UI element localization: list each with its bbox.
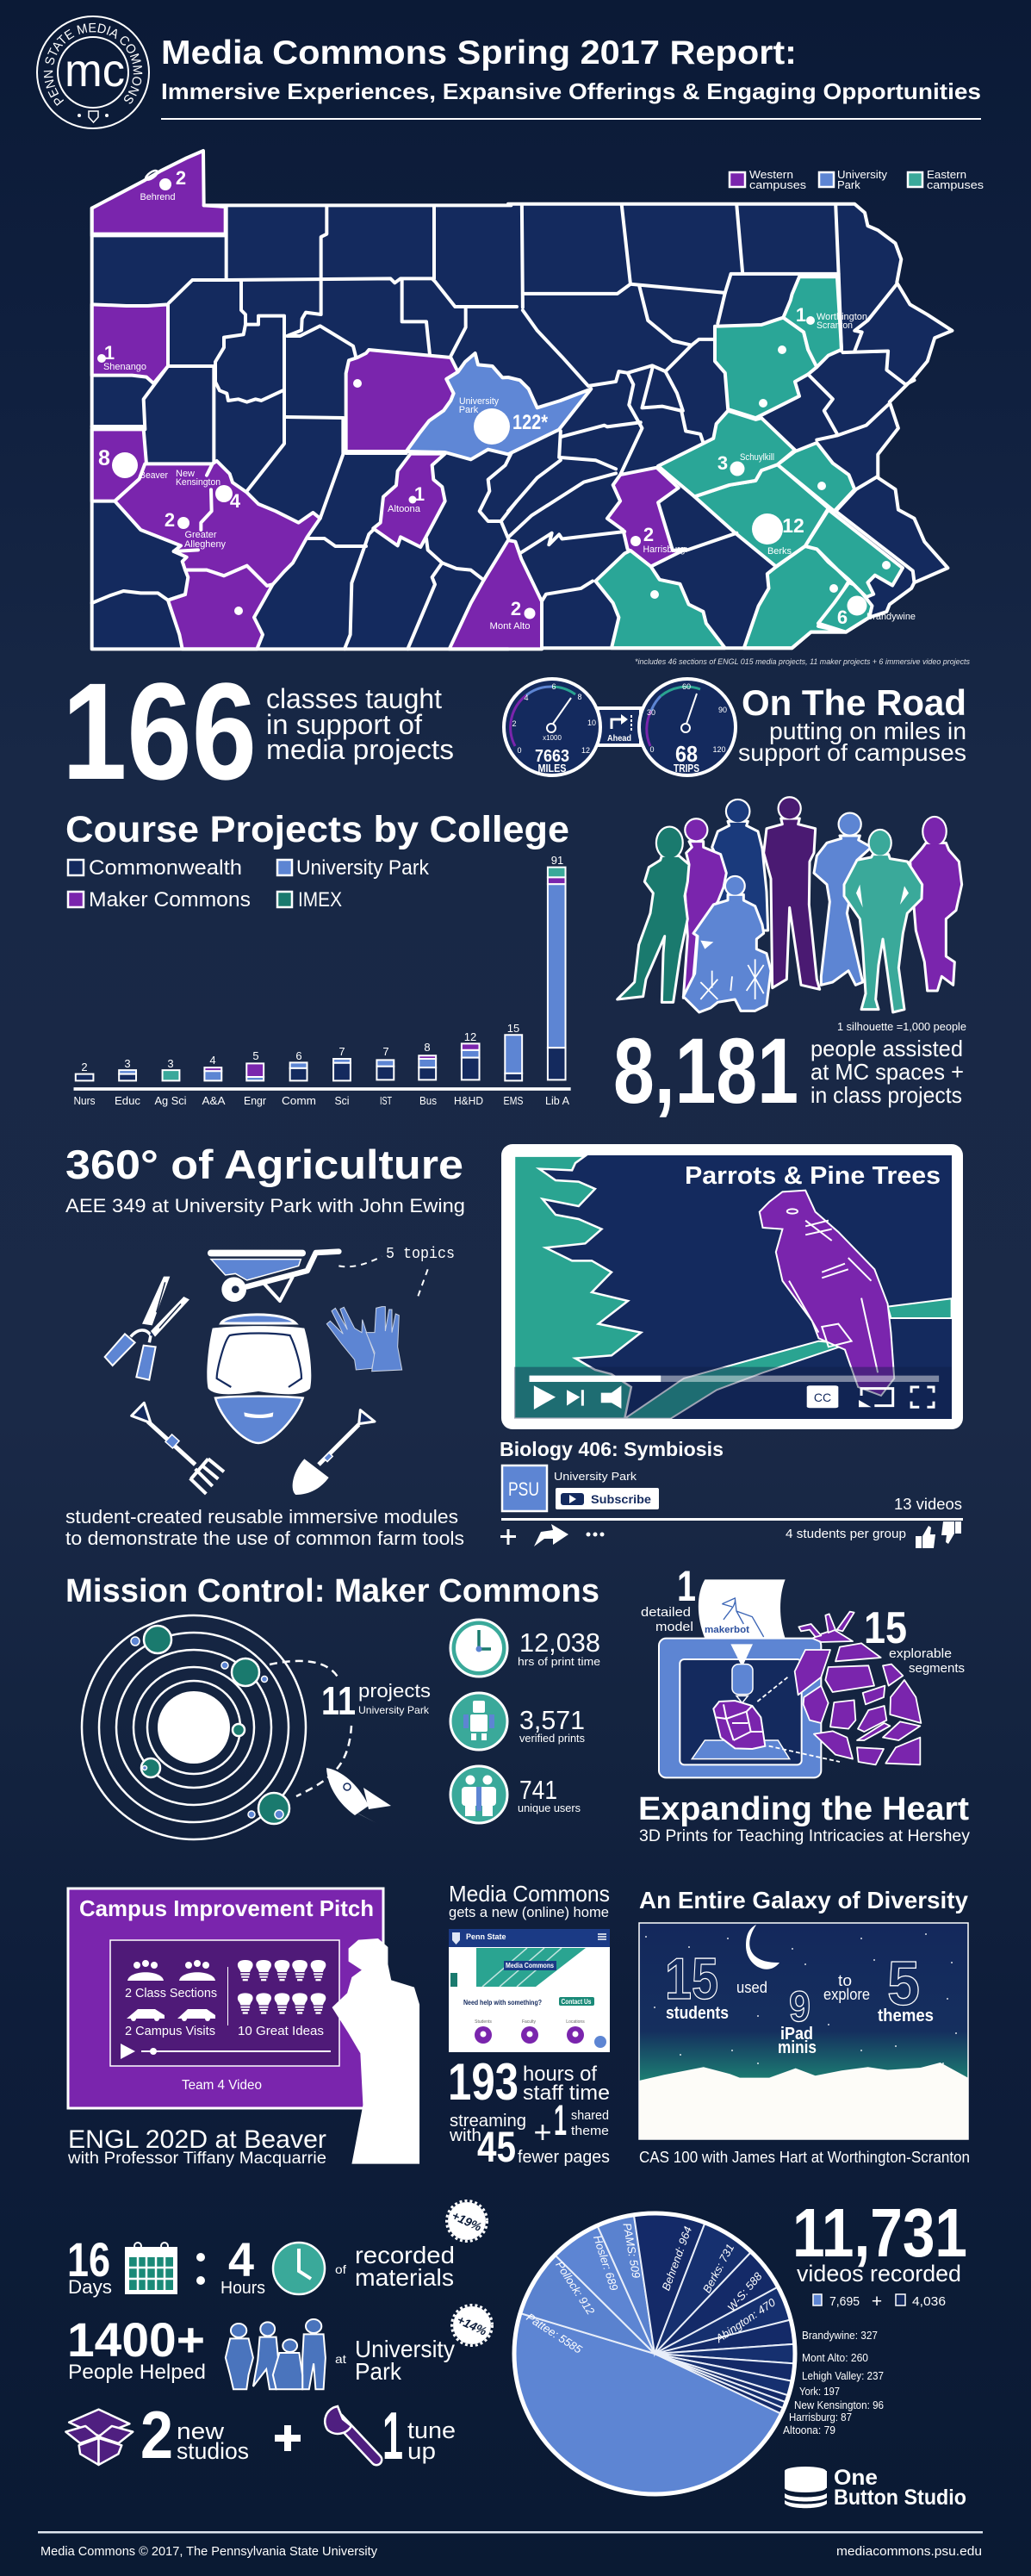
map legend: Eastern	[927, 168, 966, 181]
stat: streaming with 45 fewer pages: theme	[571, 2124, 609, 2138]
gauges: miles and trips: 68	[675, 741, 698, 767]
pie chart: videos by location: Altoona: 79	[783, 2424, 835, 2436]
gauges: miles and trips: Ahead	[607, 734, 631, 744]
logo: Penn State Media Commons seal	[36, 16, 150, 129]
map numbers and campus labels: Berks	[767, 546, 792, 557]
icon: open box	[65, 2410, 133, 2465]
pie chart: videos by location: Lehigh Valley: 237	[802, 2370, 884, 2382]
icon: 3D printer and heart	[659, 1579, 921, 1777]
pie chart: videos by location: Pattee: 5585	[524, 2311, 585, 2356]
stat: 15 explorable segments	[864, 1603, 965, 1676]
stat: 16 days : 4 hours	[67, 2232, 455, 2298]
pie chart: videos by location: Behrend: 964	[659, 2224, 694, 2293]
stat: 11 projects: projects	[358, 1680, 431, 1702]
paper sheet	[699, 1579, 786, 1639]
website screenshot: Faculty	[522, 2019, 537, 2025]
icons: thumbs up and down	[916, 1521, 961, 1548]
text: 13 videos: 13 videos	[894, 1496, 962, 1513]
map numbers and campus labels: 1	[796, 304, 806, 326]
icon: rocket	[326, 1768, 391, 1823]
bar chart: projects by college: 12	[464, 1030, 476, 1043]
website screenshot: Contact Us	[562, 1998, 592, 2006]
icon: garden fork	[132, 1403, 224, 1494]
bar chart: projects by college: 15	[507, 1022, 519, 1035]
icon: calendar	[125, 2243, 177, 2294]
chart legend: University Park	[296, 856, 430, 880]
stat: 16 days : 4 hours: of	[335, 2262, 346, 2276]
stat: 15 explorable segments: explorable	[889, 1646, 952, 1661]
exploded heart segments	[795, 1612, 921, 1764]
subheading: AEE 349: AEE 349 at University Park with John Ewing	[65, 1195, 465, 1216]
bar chart: projects by college: 7	[338, 1045, 345, 1058]
stat: 11 projects: University Park	[358, 1704, 430, 1716]
pie chart: videos by location: Berks: 731	[700, 2242, 736, 2295]
map numbers and campus labels: 1	[104, 342, 115, 364]
stat: unique users with people icon	[450, 1766, 581, 1823]
pie chart: videos by location: PAMS: 509	[620, 2222, 643, 2279]
heading: Media Commons new home: Media Commons	[449, 1881, 610, 1907]
map legend: Western	[749, 168, 793, 181]
stat: 11,731 videos recorded	[792, 2194, 967, 2312]
stat: 11,731 videos recorded: 7,695	[829, 2294, 860, 2309]
stat: 166 classes: media projects	[266, 734, 454, 765]
bar chart: projects by college: 8	[424, 1041, 431, 1054]
map numbers and campus labels	[98, 167, 916, 632]
stat: 166 classes: 166	[62, 654, 257, 808]
pie chart: videos by location: Pollock: 912	[553, 2259, 598, 2318]
bar chart: projects by college: Engr	[244, 1094, 267, 1107]
panel: Campus Improvement Pitch: 2 Campus Visits	[125, 2024, 215, 2038]
bar chart: projects by college: 5	[252, 1049, 259, 1062]
bar chart: projects by college: 3	[124, 1057, 131, 1070]
panel: galaxy scene: explore	[823, 1986, 870, 2003]
bar chart: projects by college: EMS	[503, 1094, 524, 1107]
farm tools icons	[105, 1246, 455, 1495]
map numbers and campus labels: Kensington	[176, 477, 220, 488]
stat: 8,181 people: in class projects	[811, 1082, 962, 1108]
gauges: miles and trips: 10	[587, 719, 596, 727]
caption: ENGL 202D at Beaver	[67, 2125, 326, 2168]
channel: PSU University Park: Subscribe	[591, 1492, 651, 1506]
map numbers and campus labels: Scranton	[817, 320, 853, 331]
bar chart: projects by college: Nurs	[74, 1094, 96, 1107]
stat: 11,731 videos recorded: +	[872, 2292, 882, 2312]
panel: Campus Improvement Pitch	[68, 1888, 383, 2108]
stat: streaming with 45 fewer pages: fewer pages	[518, 2148, 610, 2167]
stat: 1 tune up: 1	[382, 2398, 403, 2473]
map numbers and campus labels: 2	[165, 509, 175, 531]
map numbers and campus labels: 2	[643, 524, 654, 545]
gauges: miles and trips	[504, 679, 736, 775]
channel: PSU University Park: PSU	[508, 1478, 539, 1500]
stat: 166 classes	[62, 654, 454, 808]
gauges: miles and trips: 60	[682, 682, 691, 691]
action icons: add, share, more	[500, 1524, 605, 1546]
stat: print time with clock icon	[450, 1620, 600, 1677]
stat: streaming with 45 fewer pages: shared	[571, 2108, 609, 2123]
stat: 2 new studios: 2	[140, 2397, 173, 2473]
bar chart: projects by college: Ag Sci	[155, 1094, 187, 1107]
stat: 1400+ people helped: People Helped	[68, 2361, 206, 2384]
stat: 1 tune up: tune	[407, 2417, 456, 2443]
channel: PSU University Park	[502, 1465, 659, 1511]
silhouettes: people assisted	[618, 798, 962, 1012]
icon: One Button Studio stack	[785, 2467, 827, 2508]
map legend: campuses	[927, 178, 984, 191]
heading: On The Road: putting on miles in	[769, 718, 966, 744]
footer: mediacommons.psu.edu	[836, 2544, 982, 2559]
gauges: miles and trips: 2	[512, 719, 517, 728]
map numbers and campus labels: 2	[511, 598, 521, 619]
stat: 166 classes: classes taught	[266, 683, 442, 714]
icon: helmet	[207, 1315, 311, 1443]
chart legend	[68, 856, 430, 912]
player controls	[534, 1385, 934, 1409]
panel: galaxy scene: to	[838, 1972, 852, 1989]
map numbers and campus labels: 1	[414, 483, 425, 505]
panel: Campus Improvement Pitch: 10 Great Ideas	[238, 2024, 324, 2038]
panel: Campus Improvement Pitch: 2 Class Sections	[125, 1986, 217, 2000]
panel: Campus Improvement Pitch: Campus Improvement Pitch	[79, 1895, 374, 1921]
snow hills	[639, 2063, 968, 2139]
stat: print time with clock icon: 12,038	[519, 1627, 600, 1658]
logo: Penn State Media Commons seal: mc	[65, 45, 125, 96]
bar chart: projects by college: Sci	[334, 1094, 350, 1107]
caption: ENGL 202D at Beaver: with Professor Tiffany Macquarrie	[67, 2150, 326, 2168]
map numbers and campus labels: Shenango	[103, 362, 146, 372]
gauges: miles and trips: x1000	[543, 734, 562, 742]
subtitle: Immersive Experiences, Expansive Offerings & Engaging Opportunities	[161, 78, 981, 104]
arrow: dashed flight path	[270, 1661, 351, 1796]
stat: 8,181 people: at MC spaces +	[811, 1059, 964, 1085]
stat: print time with clock icon: hrs of print time	[518, 1655, 600, 1668]
pie chart: videos by location	[514, 2213, 884, 2494]
icon: pruning shears	[105, 1277, 189, 1380]
stat: 8,181 people	[613, 1018, 964, 1123]
stat: 166 classes: in support of	[266, 709, 422, 740]
stat: 11,731 videos recorded: 4,036	[912, 2294, 946, 2309]
stat: 15 explorable segments: segments	[909, 1661, 965, 1676]
website screenshot: Students	[475, 2019, 492, 2025]
heading: 360 of Agriculture: 360° of Agriculture	[65, 1142, 463, 1187]
panel: galaxy scene: 5	[887, 1950, 920, 2019]
stat: 193 hours of staff time	[448, 2053, 610, 2111]
stat: 8,181 people: people assisted	[811, 1036, 963, 1061]
heading: Course Projects by College: Course Projects by College	[65, 809, 569, 850]
icons: ten light bulbs	[238, 1960, 326, 2014]
map numbers and campus labels: Altoona	[388, 504, 421, 514]
map numbers and campus labels: Mont Alto	[489, 621, 531, 632]
stat: 11 projects	[321, 1678, 431, 1723]
pie chart: videos by location: Mont Alto: 260	[802, 2352, 868, 2364]
stat: streaming with 45 fewer pages: 1	[554, 2096, 567, 2144]
stat: streaming with 45 fewer pages	[449, 2096, 610, 2171]
map numbers and campus labels: 6	[837, 607, 848, 628]
stat: 193 hours of staff time: staff time	[523, 2081, 610, 2105]
caption: reusable immersive modules: to demonstrate the use of common farm tools	[65, 1528, 464, 1549]
chart legend: IMEX	[298, 888, 342, 912]
map numbers and campus labels: Allegheny	[184, 539, 226, 550]
caption: reusable immersive modules	[65, 1506, 464, 1549]
map legend: University	[837, 168, 887, 181]
chart legend: Commonwealth	[89, 856, 242, 880]
pie chart: videos by location: Hosler: 689	[591, 2234, 621, 2293]
stat: 16 days : 4 hours: Hours	[220, 2279, 265, 2298]
pie chart: videos by location: New Kensington: 96	[794, 2399, 884, 2411]
stat: 1 detailed model: 1	[677, 1562, 696, 1610]
map numbers and campus labels: 122*	[512, 411, 549, 434]
label: One Button Studio: One	[834, 2466, 878, 2490]
icons: class sections people	[127, 1960, 215, 1981]
video scrubber	[121, 2044, 331, 2059]
heading: On The Road	[738, 682, 966, 766]
badge: +19%: +19%	[450, 2208, 484, 2234]
website screenshot: Media Commons	[506, 1962, 554, 1969]
website screenshot: Locations	[566, 2019, 585, 2025]
stat: streaming with 45 fewer pages: streaming	[450, 2112, 526, 2131]
icon: people group	[226, 2319, 326, 2389]
map numbers and campus labels: Greater	[184, 530, 217, 540]
stat: 16 days : 4 hours: 4	[228, 2232, 254, 2287]
panel: galaxy scene: minis	[778, 2038, 817, 2057]
heading: Media Commons new home	[449, 1881, 610, 1920]
video player: Parrots & Pine Trees: CC	[814, 1391, 831, 1404]
website screenshot: Penn State	[466, 1932, 506, 1941]
map legend	[730, 168, 984, 191]
panel: galaxy scene: iPad	[780, 2025, 813, 2044]
heading: Expanding the Heart: Expanding the Heart	[638, 1791, 969, 1827]
panel: galaxy scene	[639, 1923, 968, 2139]
stat: 2 new studios	[140, 2397, 249, 2473]
caption: ENGL 202D at Beaver: ENGL 202D at Beaver	[68, 2125, 326, 2154]
title rule	[161, 118, 981, 120]
bar chart: projects by college: 4	[209, 1054, 216, 1067]
bar chart: projects by college: Educ	[115, 1094, 140, 1107]
gauges: miles and trips: TRIPS	[674, 762, 699, 775]
gauges: miles and trips: 12	[581, 746, 590, 755]
bar chart: projects by college: 3	[167, 1057, 174, 1070]
stat: 1 tune up	[382, 2398, 456, 2473]
pie chart: videos by location: Harrisburg: 87	[789, 2411, 852, 2424]
badge: +19%	[446, 2200, 488, 2242]
stat: 2 new studios: new	[177, 2418, 225, 2444]
bar chart: projects by college: 6	[295, 1049, 302, 1062]
bar chart: projects by college: IST	[380, 1094, 392, 1107]
caption: reusable immersive modules: student-created reusable immersive modules	[65, 1506, 458, 1528]
silhouette: presenter	[332, 1938, 419, 2164]
stat: 1 detailed model: model	[655, 1620, 693, 1634]
gauges: miles and trips: 4	[524, 694, 529, 702]
map numbers and campus labels: 2	[176, 167, 186, 189]
channel: PSU University Park: University Park	[554, 1470, 637, 1483]
chart legend: Maker Commons	[89, 888, 251, 912]
map footnote: *includes 46 sections of ENGL 015 media projects, 11 maker projects + 6 immersive video projects	[635, 657, 970, 666]
map legend: campuses	[749, 178, 807, 191]
map numbers and campus labels: Worthington	[817, 312, 867, 322]
icons: campus cars	[127, 2009, 215, 2021]
panel: Campus Improvement Pitch: Team 4 Video	[182, 2078, 262, 2093]
video heading: Biology 406: Biology 406: Symbiosis	[500, 1438, 724, 1460]
panel: galaxy scene: themes	[878, 2007, 934, 2025]
panel: galaxy scene: students	[666, 2004, 729, 2023]
note: silhouette scale: 1 silhouette =1,000 people	[837, 1020, 966, 1033]
video player: Parrots & Pine Trees	[501, 1144, 963, 1429]
gauges: miles and trips: 90	[718, 706, 727, 714]
stat: streaming with 45 fewer pages: +	[533, 2114, 552, 2150]
stat: 1400+ people helped: University	[355, 2336, 455, 2362]
gauges: miles and trips: 7663	[535, 747, 569, 766]
map legend: Park	[837, 178, 860, 191]
pie chart: videos by location: W-S: 588	[724, 2269, 765, 2314]
pie chart: videos by location: Brandywine: 327	[802, 2330, 878, 2342]
map numbers and campus labels: New	[176, 469, 195, 479]
pie chart: videos by location: Abington: 470	[712, 2295, 779, 2345]
map: Pennsylvania counties	[92, 151, 952, 649]
bar chart: projects by college	[74, 854, 571, 1107]
stat: verified prints with robot icon: 3,571	[519, 1705, 585, 1735]
stat: 11,731 videos recorded: videos recorded	[797, 2261, 961, 2287]
stat: unique users with people icon: unique users	[518, 1802, 581, 1814]
bar chart: projects by college: Bus	[419, 1094, 437, 1107]
label: One Button Studio	[834, 2466, 966, 2510]
stat: 1 tune up: up	[407, 2438, 436, 2464]
stat: 1400+ people helped: Park	[355, 2358, 402, 2385]
footer: Media Commons © 2017, The Pennsylvania State University	[40, 2544, 377, 2559]
footer	[38, 2531, 983, 2559]
icon: shovel	[293, 1410, 375, 1495]
parrot	[760, 1191, 894, 1396]
gauges: miles and trips: 8	[577, 693, 582, 701]
gauges: miles and trips: 6	[551, 682, 556, 691]
stat: streaming with 45 fewer pages: 45	[477, 2123, 516, 2171]
icon: gloves	[326, 1307, 402, 1372]
panel: galaxy scene: 9	[789, 1982, 811, 2031]
text: 4 students per group: 4 students per group	[786, 1527, 906, 1541]
map numbers and campus labels: Harrisburg	[643, 544, 686, 555]
panel: galaxy scene: 15	[665, 1946, 718, 2012]
stat: 1400+ people helped: at	[335, 2352, 346, 2366]
heading: On The Road: support of campuses	[738, 739, 966, 766]
stat: 2 new studios: studios	[177, 2438, 249, 2464]
stat: 16 days : 4 hours: materials	[355, 2264, 454, 2291]
stat: verified prints with robot icon	[450, 1693, 585, 1750]
divider	[501, 1518, 963, 1521]
stat: 11,731 videos recorded: 11,731	[792, 2194, 967, 2271]
pie chart: videos by location: York: 197	[799, 2386, 840, 2398]
stat: 16 days : 4 hours: Days	[68, 2276, 112, 2298]
icon: wrench	[325, 2406, 376, 2460]
stat: verified prints with robot icon: verified prints	[519, 1733, 585, 1745]
gauges: miles and trips: 0	[517, 746, 522, 755]
icon: wheelbarrow	[208, 1250, 338, 1302]
stat: 1400+ people helped	[67, 2312, 455, 2389]
heading: On The Road: On The Road	[742, 682, 966, 723]
stat: 193 hours of staff time: hours of	[523, 2063, 597, 2086]
bar chart: projects by college: H&HD	[454, 1094, 483, 1107]
gauges: miles and trips: 0	[649, 745, 655, 754]
callout: 5 topics: 5 topics	[386, 1246, 455, 1263]
stat: 1 detailed model	[641, 1562, 696, 1634]
gauges: miles and trips: 120	[712, 745, 726, 754]
stat: 8,181 people: 8,181	[613, 1018, 798, 1123]
map numbers and campus labels: 3	[717, 452, 728, 474]
stat: streaming with 45 fewer pages: with	[449, 2126, 481, 2145]
bar chart: projects by college: A&A	[202, 1094, 226, 1107]
stars	[645, 1933, 957, 2064]
bar chart: projects by college: Lib A	[545, 1094, 569, 1107]
badge: +14%: +14%	[455, 2312, 489, 2338]
website screenshot	[449, 1929, 610, 2052]
map numbers and campus labels: 12	[782, 514, 804, 537]
map numbers and campus labels: Park	[459, 405, 479, 415]
map numbers and campus labels: 4	[230, 490, 241, 512]
map numbers and campus labels: Beaver	[140, 470, 168, 481]
plus sign	[275, 2425, 301, 2451]
stat: unique users with people icon: 741	[519, 1775, 557, 1805]
title: Media Commons Spring 2017 Report:	[161, 34, 797, 72]
video title: Parrots & Pine Trees	[685, 1162, 941, 1190]
icon: clock	[273, 2243, 325, 2294]
logo: Penn State Media Commons seal: PENN STATE MEDIA COMMONS	[43, 22, 143, 106]
map numbers and campus labels: Brandywine	[866, 612, 916, 622]
progress bar	[530, 1376, 939, 1382]
badge: +14%	[451, 2305, 493, 2345]
bar chart: projects by college: 91	[551, 854, 563, 867]
stat: 1 detailed model: detailed	[641, 1605, 691, 1620]
map numbers and campus labels: Schuylkill	[740, 452, 774, 463]
stat: 16 days : 4 hours: 16	[67, 2232, 110, 2287]
map numbers and campus labels: 8	[98, 446, 110, 470]
heading: Mission Control: Mission Control: Maker Commons	[65, 1573, 599, 1609]
website screenshot: Need help with something?	[463, 1999, 542, 2007]
map dots	[97, 178, 891, 619]
gauges: miles and trips: MILES	[537, 762, 567, 775]
label: One Button Studio: Button Studio	[834, 2486, 966, 2510]
bar chart: projects by college: 2	[81, 1061, 88, 1073]
stat: 11 projects: 11	[321, 1678, 356, 1723]
orbit diagram	[82, 1615, 306, 1839]
map numbers and campus labels: University	[459, 396, 499, 407]
icon: 3D printer and heart: makerbot	[705, 1625, 749, 1635]
stat: 1400+ people helped: 1400+	[67, 2312, 205, 2367]
panel: galaxy scene: used	[736, 1979, 767, 1996]
map numbers and campus labels: Behrend	[140, 192, 176, 202]
stat: 16 days : 4 hours: recorded	[355, 2242, 455, 2268]
caption: CAS 100: CAS 100 with James Hart at Worthington-Scranton	[639, 2149, 970, 2166]
stat: 193 hours of staff time: 193	[448, 2053, 519, 2111]
heading: An Entire Galaxy of Diversity: An Entire Galaxy of Diversity	[639, 1887, 968, 1913]
bar chart: projects by college: 7	[382, 1045, 389, 1058]
gauges: miles and trips: 30	[647, 708, 655, 717]
bar chart: projects by college: Comm	[282, 1094, 316, 1107]
heading: Media Commons new home: gets a new (online) home	[449, 1904, 609, 1920]
stat: 15 explorable segments: 15	[864, 1603, 907, 1653]
subheading: 3D Prints: 3D Prints for Teaching Intricacies at Hershey	[639, 1827, 971, 1845]
moon	[746, 1925, 779, 1969]
